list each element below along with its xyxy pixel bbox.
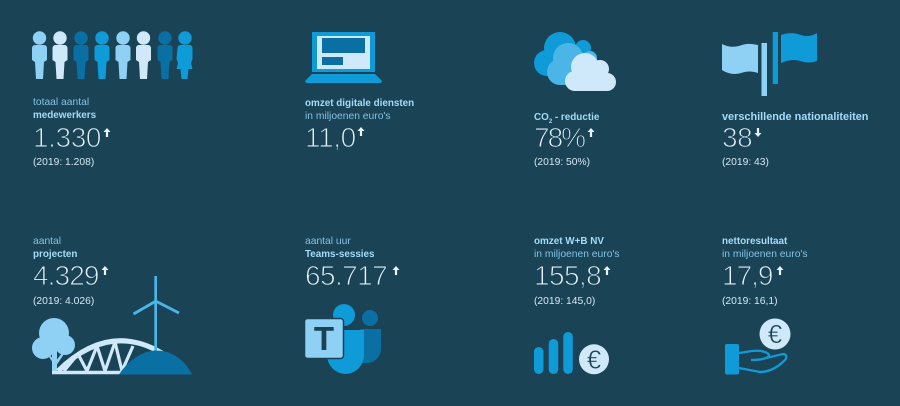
stat: medewerkers: medewerkers [33, 110, 96, 121]
icon: row of eight people [32, 31, 192, 79]
stat: nettoresultaat: (2019: 16,1) [722, 296, 778, 307]
arrow: up [604, 266, 610, 275]
stat: omzet W+B NV: omzet W+B NV [534, 236, 604, 247]
stat: Teams-sessies: 65.717 [305, 260, 387, 291]
stat: projecten: (2019: 4.026) [33, 296, 94, 307]
arrow: up [776, 266, 784, 275]
stat: projecten: aantal [33, 236, 61, 247]
stat: omzet digitale diensten [305, 98, 414, 153]
stat: omzet digitale diensten: omzet digitale diensten [305, 98, 414, 109]
arrow: up [392, 266, 400, 275]
arrow: up [358, 127, 364, 136]
icon: laptop [305, 32, 382, 83]
icon: bar chart with euro [534, 332, 609, 374]
stat: CO2-reductie [534, 112, 599, 168]
stat: omzet W+B NV: in miljoenen euro's [534, 249, 620, 260]
stat: medewerkers: totaal aantal [33, 97, 89, 108]
stat: Teams-sessies: Teams-sessies [305, 249, 375, 260]
icon: hand with euro coin [725, 318, 790, 374]
stat: Teams-sessies [305, 236, 400, 291]
stat: projecten: 4.329 [33, 260, 99, 291]
stat: CO2-reductie: CO2 - reductie [534, 112, 599, 125]
stat: medewerkers: (2019: 1.208) [33, 157, 94, 168]
arrow: down [754, 128, 762, 137]
icon: hand with euro coin: € [768, 319, 783, 349]
stat: omzet digitale diensten: in miljoenen euro's [305, 111, 391, 122]
arrow: up [102, 266, 108, 275]
icon: Teams logo: T [314, 320, 334, 357]
icon: Teams logo [305, 304, 381, 374]
stat: projecten [33, 236, 108, 307]
stat: nettoresultaat [722, 236, 808, 307]
stat: CO2-reductie: 78% [534, 122, 584, 153]
icon: bar chart with euro: € [587, 344, 602, 374]
stat: nationaliteiten: 38 [722, 122, 752, 153]
stat: medewerkers: 1.330 [33, 122, 101, 153]
icon: tree, bridge and wind turbine [32, 276, 192, 374]
stat: omzet W+B NV: 155,8 [534, 260, 601, 291]
arrow: up [588, 128, 594, 137]
stat: projecten: projecten [33, 249, 77, 260]
stat: omzet W+B NV [534, 236, 620, 307]
stat: nationaliteiten [722, 111, 868, 168]
stat: Teams-sessies: aantal uur [305, 236, 351, 247]
stat: medewerkers [33, 97, 110, 168]
stat: nettoresultaat: 17,9 [722, 260, 772, 291]
stat: nationaliteiten: (2019: 43) [722, 157, 769, 168]
stat: nettoresultaat: nettoresultaat [722, 236, 787, 247]
icon: clouds [534, 32, 616, 91]
stat: CO2-reductie: (2019: 50%) [534, 157, 590, 168]
icon: flags [722, 32, 817, 96]
stat: nettoresultaat: in miljoenen euro's [722, 249, 808, 260]
stat: nationaliteiten: verschillende nationaliteiten [722, 111, 868, 123]
arrow: up [104, 128, 110, 137]
stat: omzet digitale diensten: 11,0 [305, 122, 356, 153]
stat: omzet W+B NV: (2019: 145,0) [534, 296, 595, 307]
